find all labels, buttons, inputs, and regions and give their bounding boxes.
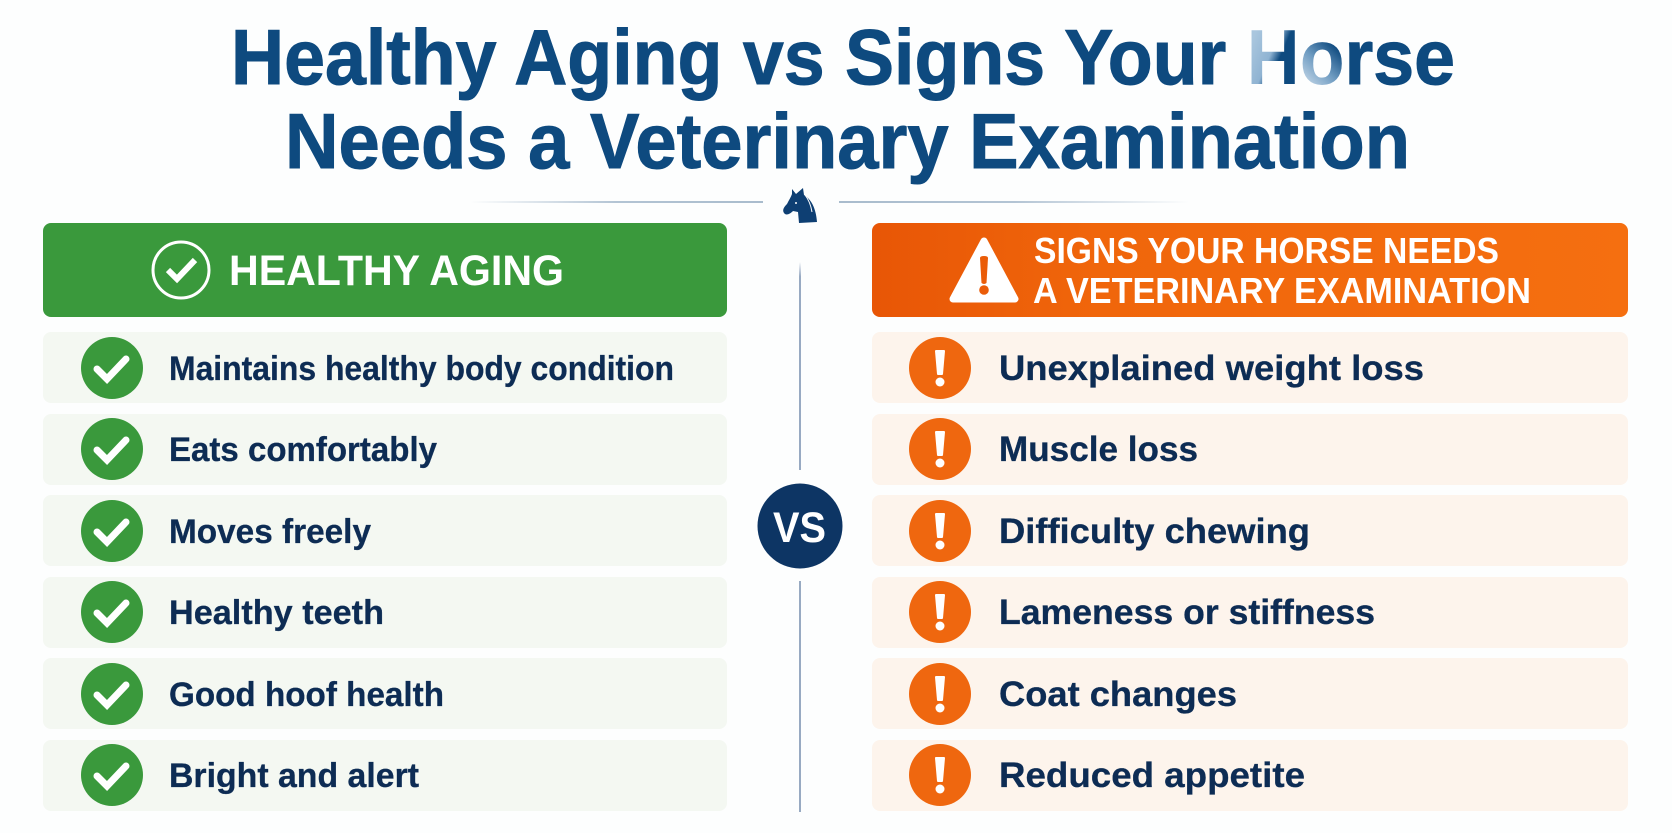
row: eats comfortably: Eats comfortably <box>169 431 437 469</box>
row: reduced appetite: Reduced appetite <box>999 756 1305 795</box>
row: reduced appetite <box>872 740 1628 811</box>
row: maintains healthy body condition <box>43 332 727 403</box>
row: maintains healthy body condition: Maintains healthy body condition <box>169 350 674 388</box>
row: healthy teeth <box>43 577 727 648</box>
row: muscle loss <box>872 414 1628 485</box>
row: unexplained weight loss: Unexplained weight loss <box>999 349 1424 388</box>
row: lameness or stiffness <box>872 577 1628 648</box>
row: muscle loss: Muscle loss <box>999 430 1198 469</box>
row: healthy teeth: Healthy teeth <box>169 594 384 632</box>
healthy aging header: HEALTHY AGING <box>229 247 564 295</box>
centre vertical divider <box>799 262 801 812</box>
panel: healthy aging <box>43 223 727 811</box>
title: Healthy Aging vs Signs Your Horse <box>231 13 1455 101</box>
row: good hoof health <box>43 658 727 729</box>
row: coat changes: Coat changes <box>999 675 1237 714</box>
panel: signs your horse needs a veterinary examination <box>872 223 1628 811</box>
title divider with horse icon <box>470 188 1189 223</box>
row: coat changes <box>872 658 1628 729</box>
row: difficulty chewing <box>872 495 1628 566</box>
title: Needs a Veterinary Examination <box>285 97 1410 185</box>
VS badge <box>758 484 842 568</box>
row: moves freely: Moves freely <box>169 513 371 551</box>
row: good hoof health: Good hoof health <box>169 676 444 714</box>
row: bright and alert: Bright and alert <box>169 757 419 795</box>
row: moves freely <box>43 495 727 566</box>
warning header: SIGNS YOUR HORSE NEEDS <box>1034 230 1499 271</box>
row: unexplained weight loss <box>872 332 1628 403</box>
row: difficulty chewing: Difficulty chewing <box>999 512 1310 551</box>
icon: warning triangle <box>953 241 1015 299</box>
warning header <box>872 223 1628 317</box>
healthy aging header <box>43 223 727 317</box>
title <box>231 13 1455 185</box>
icon: horse head <box>783 188 817 223</box>
row: lameness or stiffness: Lameness or stiffness <box>999 593 1375 632</box>
icon: circled check <box>153 242 209 298</box>
row: eats comfortably <box>43 414 727 485</box>
warning header: A VETERINARY EXAMINATION <box>1033 270 1531 311</box>
VS badge: VS <box>773 504 826 552</box>
row: bright and alert <box>43 740 727 811</box>
